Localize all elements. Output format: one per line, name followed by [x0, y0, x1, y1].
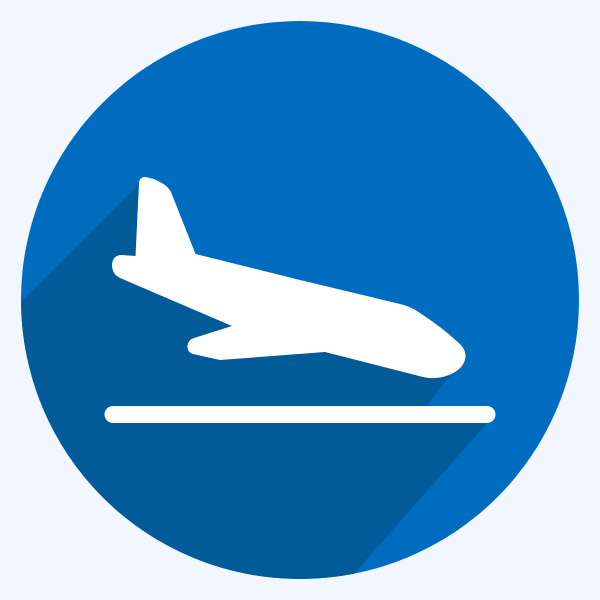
runway — [104, 406, 496, 423]
long shadow — [0, 184, 487, 600]
airplane — [112, 177, 466, 378]
